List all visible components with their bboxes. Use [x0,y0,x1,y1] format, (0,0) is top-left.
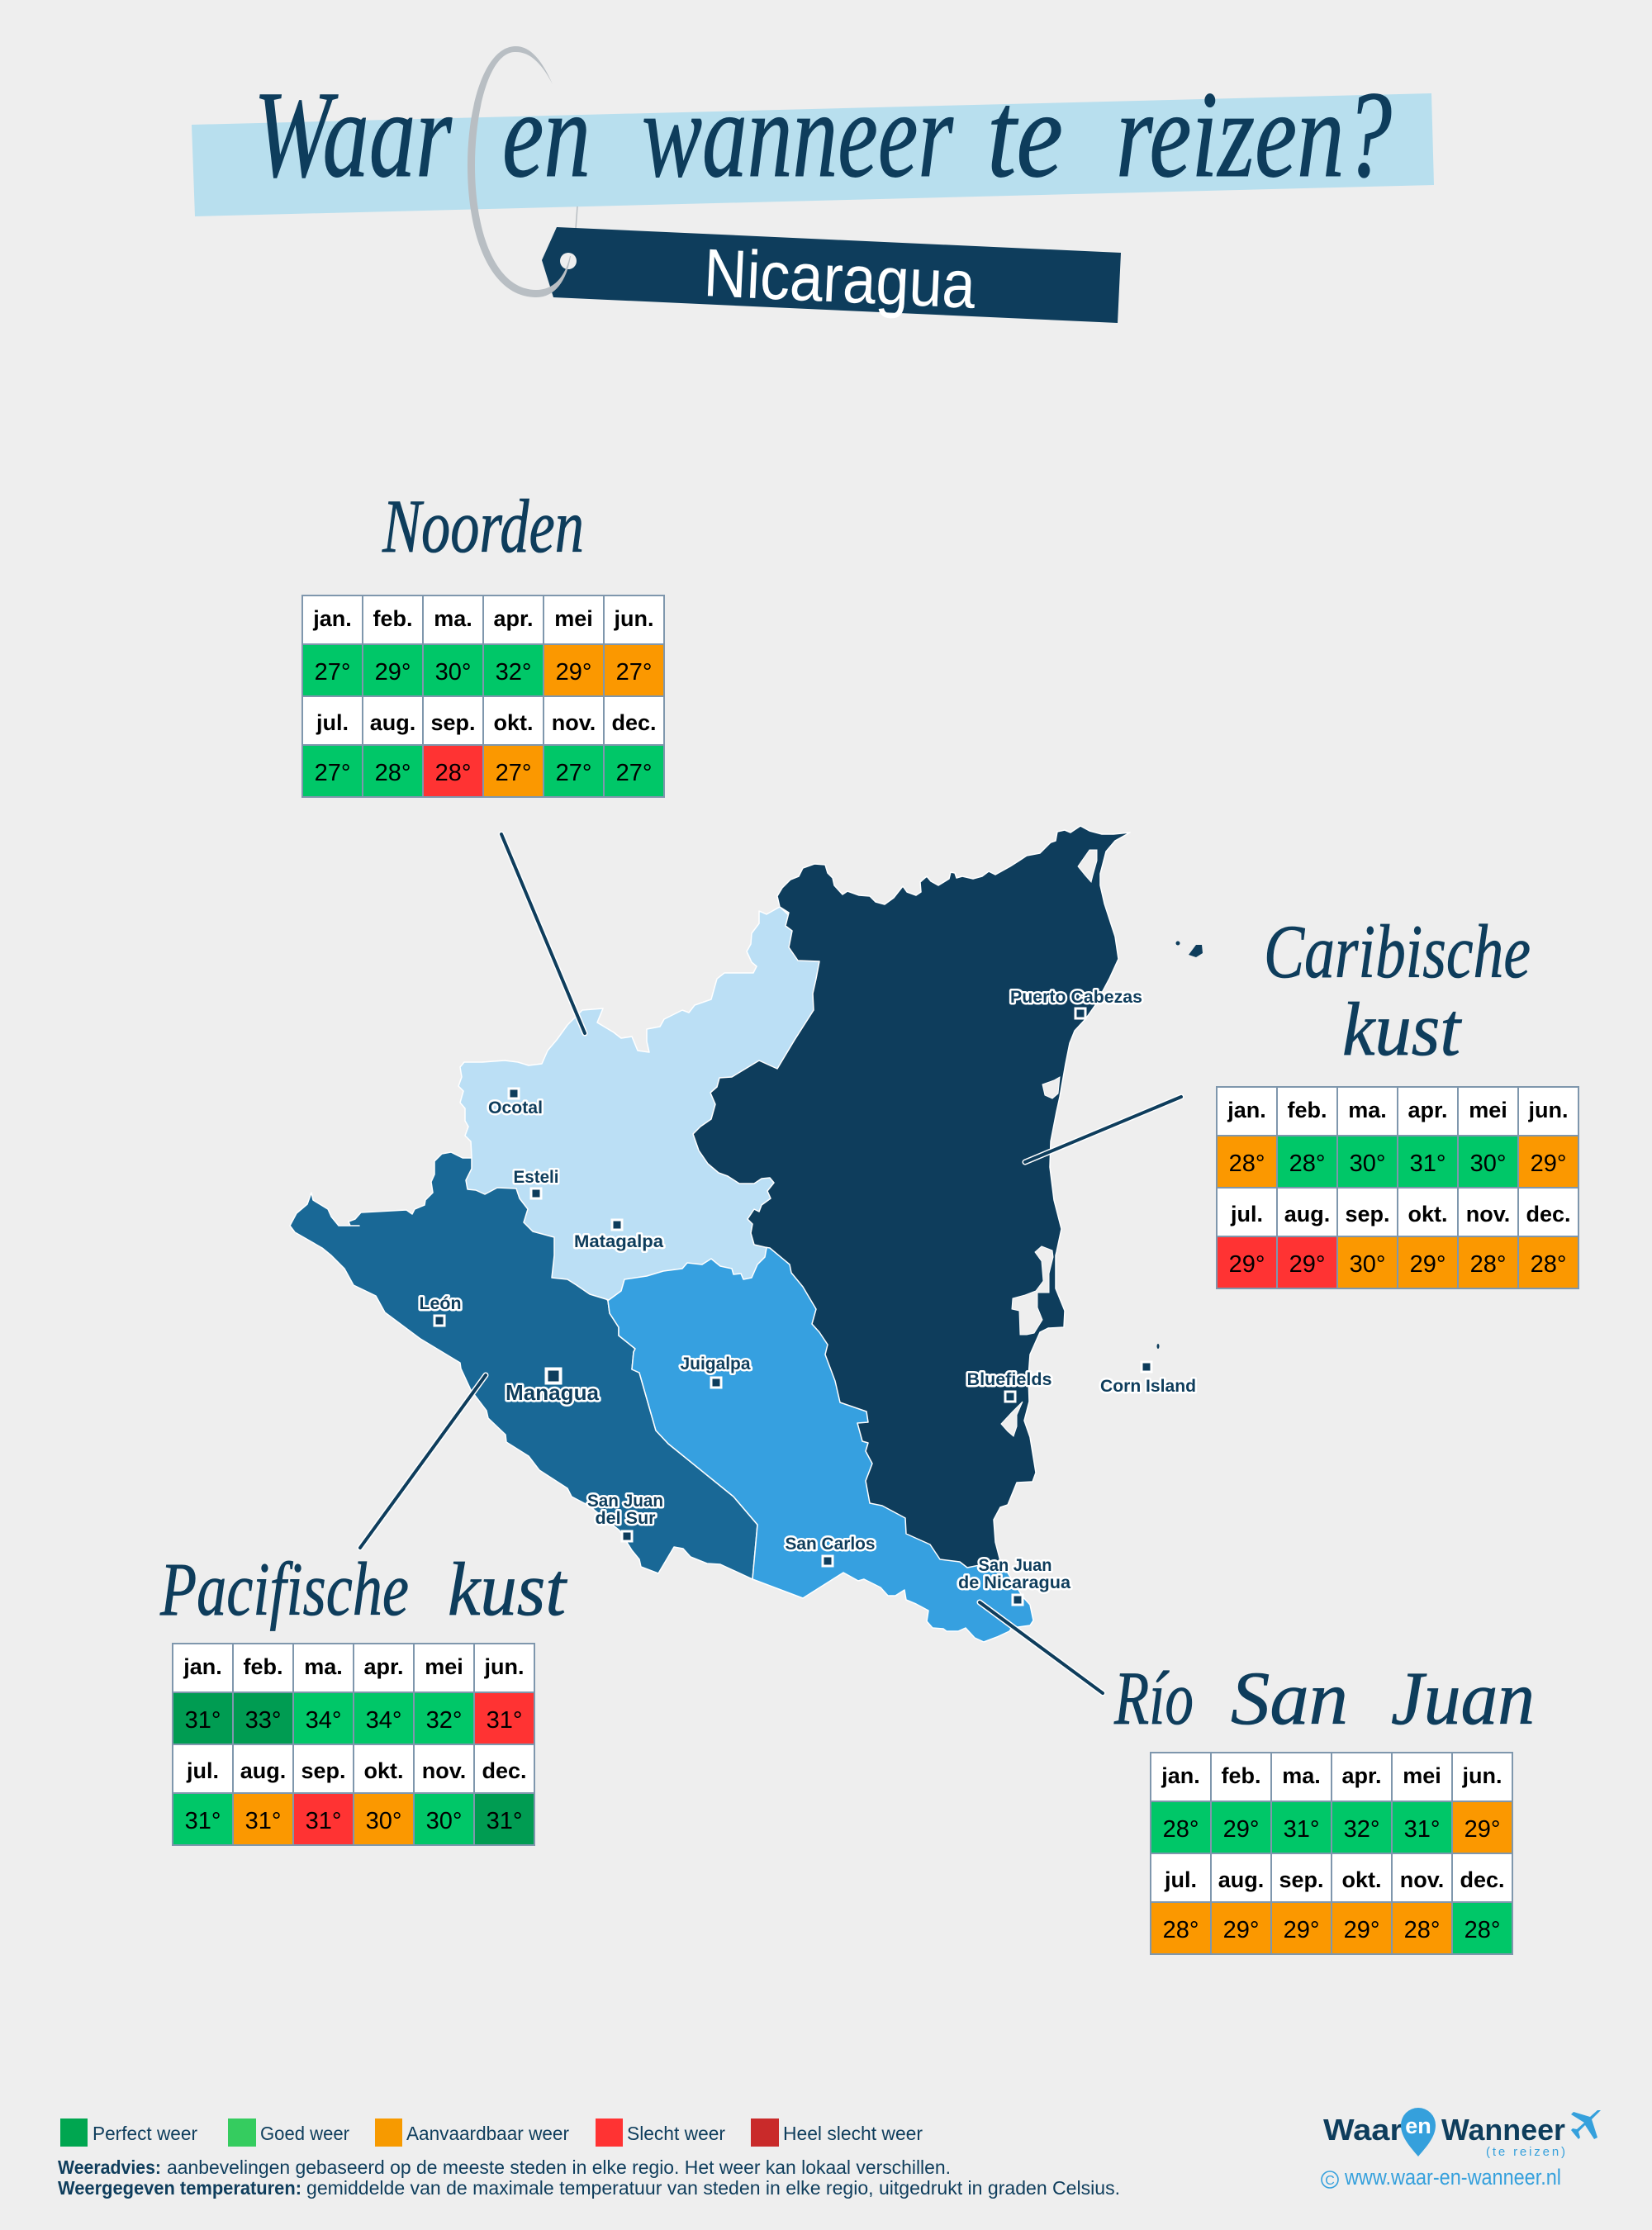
callout line: Río San Juan [980,1602,1103,1693]
city: Matagalpa [574,1220,663,1251]
table: Caribische kust: dec. [1526,1202,1571,1226]
logo: Waar en Wanneer: Waar [1323,2113,1403,2147]
city: Corn Island [1100,1362,1196,1396]
table: Pacifische kust: jul. [186,1758,219,1783]
table: Pacifische kust: okt. [363,1758,404,1783]
table: Caribische kust: jul. [1230,1202,1263,1226]
title [254,66,1392,203]
legend item: Slecht weer [596,2118,725,2147]
heading: Río San Juan: Juan [1391,1656,1535,1740]
islands [1156,942,1203,1349]
table: Caribische kust: 29° [1531,1151,1566,1177]
table: Noorden: 27° [616,659,652,686]
legend item: Goed weer [228,2118,349,2147]
table: Pacifische kust: jan. [183,1654,222,1679]
table: Noorden: apr. [493,606,534,631]
table: Río San Juan: 29° [1464,1816,1500,1843]
table: Caribische kust: 29° [1289,1251,1325,1278]
website credit: C [1325,2174,1335,2188]
table: Noorden: 27° [616,760,652,786]
table: Río San Juan: 29° [1284,1917,1319,1943]
table: Caribische kust: 28° [1531,1251,1566,1278]
table: Río San Juan: aug. [1218,1867,1264,1892]
callout line: Pacifische kust [360,1375,486,1548]
city: San Juan de Nicaragua: de Nicaragua [958,1573,1070,1592]
heading: Caribische kust: kust [1342,987,1462,1071]
table: Pacifische kust [173,1644,534,1845]
table: Río San Juan: 32° [1344,1816,1379,1843]
legend item: Aanvaardbaar weer: Aanvaardbaar weer [406,2123,569,2144]
table: Río San Juan: jun. [1462,1763,1502,1788]
table: Río San Juan: jul. [1164,1867,1197,1892]
heading: Caribische kust: Caribische [1264,909,1531,994]
table: Río San Juan: 31° [1284,1816,1319,1843]
table: Noorden: jun. [613,606,654,631]
region: Río San Juan [608,1239,1033,1642]
table: Noorden: jan. [312,606,352,631]
table: Pacifische kust: 30° [426,1808,462,1834]
city: San Juan del Sur [587,1492,663,1541]
city: San Carlos [785,1535,876,1566]
table: Río San Juan: 29° [1223,1917,1259,1943]
logo: Waar en Wanneer: (te reizen) [1486,2145,1565,2159]
table: Pacifische kust: 32° [426,1707,462,1734]
tag ring [468,46,571,297]
tag string [576,206,577,229]
legend item: Perfect weer: Perfect weer [93,2123,197,2144]
city: San Juan del Sur: San Juan [587,1492,663,1511]
legend item: Goed weer: Goed weer [260,2123,349,2144]
table: Río San Juan: 31° [1404,1816,1440,1843]
table: Río San Juan: dec. [1460,1867,1505,1892]
table: Río San Juan: ma. [1282,1763,1321,1788]
legend item: Aanvaardbaar weer [375,2118,569,2147]
table: Pacifische kust: 31° [185,1808,221,1834]
table: Caribische kust: 31° [1410,1151,1446,1177]
city: San Juan de Nicaragua [958,1556,1070,1605]
table: Noorden: 28° [435,760,471,786]
icon: map pin: en [1405,2114,1431,2138]
table: Caribische kust: jun. [1528,1098,1568,1122]
table: Río San Juan: 28° [1404,1917,1440,1943]
heading: Pacifische kust: kust [448,1547,567,1631]
table: Río San Juan: mei [1403,1763,1441,1788]
city: San Carlos: San Carlos [785,1535,876,1554]
header [192,46,1434,323]
panel: Río San Juan [1113,1656,1535,1954]
table: Río San Juan: 28° [1163,1917,1199,1943]
heading: Noorden: Noorden [382,484,584,568]
table: Pacifische kust: 30° [366,1808,401,1834]
table: Noorden: 27° [496,760,531,786]
city: Puerto Cabezas: Puerto Cabezas [1010,988,1142,1007]
table: Noorden: 32° [496,659,531,686]
city: Ocotal: Ocotal [488,1098,543,1117]
city: Managua: Managua [506,1380,600,1405]
table: Noorden: sep. [430,710,476,735]
heading: Río San Juan: Río [1113,1656,1194,1740]
heading: Caribische kust [1264,909,1531,1071]
table: Caribische kust: 28° [1229,1151,1265,1177]
table: Pacifische kust: jun. [484,1654,524,1679]
table: Noorden: 29° [556,659,591,686]
table: Caribische kust [1217,1087,1578,1288]
table: Noorden: nov. [552,710,596,735]
table: Noorden: 30° [435,659,471,686]
title: te [987,66,1063,203]
callout line: Noorden [501,834,585,1033]
city: León: León [420,1294,461,1313]
city: Bluefields [966,1370,1052,1402]
logo: Waar en Wanneer: Wanneer [1441,2113,1565,2147]
tag: Nicaragua [542,227,1121,323]
table: Pacifische kust: feb. [243,1654,283,1679]
logo: Waar en Wanneer [1323,2108,1601,2159]
table: Noorden: feb. [373,606,413,631]
city: San Juan de Nicaragua: San Juan [978,1556,1052,1575]
table: Caribische kust: 30° [1350,1151,1385,1177]
table: Pacifische kust: 31° [306,1808,341,1834]
city: Matagalpa: Matagalpa [574,1232,663,1251]
table: Caribische kust: nov. [1466,1202,1510,1226]
footnote: Weergegeven temperaturen: gemiddelde van de maximale temperatuur van steden in elke regio, uitgedrukt in graden Celsius. [306,2177,1120,2199]
table: Río San Juan: jan. [1161,1763,1200,1788]
table: Caribische kust: ma. [1348,1098,1387,1122]
table: Noorden: 27° [556,760,591,786]
table: Río San Juan: 29° [1223,1816,1259,1843]
region: Pacifische kust [290,1152,757,1579]
table: Caribische kust: mei [1469,1098,1507,1122]
table: Caribische kust: apr. [1408,1098,1448,1122]
title: en [502,66,591,203]
table: Caribische kust: feb. [1287,1098,1327,1122]
table: Río San Juan: 28° [1464,1917,1500,1943]
city: Juigalpa [681,1355,751,1388]
table: Río San Juan: 29° [1344,1917,1379,1943]
footnote: Weeradvies: aanbevelingen gebaseerd op de meeste steden in elke regio. Het weer kan lokaal verschillen. [167,2156,951,2178]
panel: Pacifische kust [159,1547,567,1845]
table: Pacifische kust: 34° [366,1707,401,1734]
table: Noorden: ma. [434,606,472,631]
title: Waar [254,66,452,203]
table: Pacifische kust: 33° [245,1707,281,1734]
city: Puerto Cabezas [1010,988,1142,1018]
panel: Caribische kust [1217,909,1578,1288]
heading: Río San Juan: San [1231,1656,1348,1740]
table: Pacifische kust: apr. [363,1654,404,1679]
icon: map pin [1401,2108,1436,2156]
table: Río San Juan: feb. [1221,1763,1261,1788]
heading: Río San Juan [1113,1656,1535,1740]
table: Caribische kust: 29° [1229,1251,1265,1278]
region: Caribische kust [693,826,1130,1568]
table: Pacifische kust: nov. [422,1758,466,1783]
city: San Juan del Sur: del Sur [595,1509,656,1528]
table: Pacifische kust: aug. [240,1758,286,1783]
lagoons [1001,850,1097,1436]
city: Juigalpa: Juigalpa [681,1355,751,1374]
map of Nicaragua [290,826,1203,1642]
table: Caribische kust: okt. [1408,1202,1448,1226]
table: Noorden [302,595,664,797]
legend item: Perfect weer [60,2118,197,2147]
table: Noorden: aug. [370,710,415,735]
table: Pacifische kust: sep. [301,1758,346,1783]
table: Río San Juan: okt. [1341,1867,1382,1892]
table: Río San Juan: apr. [1341,1763,1382,1788]
table: Río San Juan: sep. [1279,1867,1324,1892]
table: Caribische kust: 29° [1410,1251,1446,1278]
table: Pacifische kust: ma. [304,1654,343,1679]
table: Río San Juan: 28° [1163,1816,1199,1843]
city: León [420,1294,461,1326]
table: Caribische kust: 28° [1289,1151,1325,1177]
icon: plane [1571,2110,1601,2139]
table: Noorden: okt. [493,710,534,735]
table: Noorden: 27° [315,760,350,786]
legend item: Heel slecht weer: Heel slecht weer [783,2123,923,2144]
table: Noorden: mei [554,606,593,631]
city: Esteli: Esteli [514,1168,558,1187]
table: Caribische kust: 30° [1350,1251,1385,1278]
city: Corn Island: Corn Island [1100,1377,1196,1396]
title: reizen? [1116,66,1392,203]
table: Caribische kust: 28° [1470,1251,1506,1278]
title band [192,93,1434,216]
region: Noorden [458,907,826,1300]
table: Noorden: jul. [316,710,349,735]
city: Ocotal [488,1089,543,1117]
footnote: Weergegeven temperaturen: Weergegeven temperaturen: [58,2177,301,2199]
table: Pacifische kust: mei [425,1654,463,1679]
table: Río San Juan: nov. [1400,1867,1444,1892]
table: Caribische kust: 30° [1470,1151,1506,1177]
legend [60,2118,923,2147]
title: wanneer [642,66,953,203]
legend item: Heel slecht weer [751,2118,923,2147]
heading: Pacifische kust: Pacifische [159,1547,409,1631]
table: Pacifische kust: 34° [306,1707,341,1734]
city: Managua [506,1369,600,1405]
legend item: Slecht weer: Slecht weer [627,2123,725,2144]
panel: Noorden [302,484,664,797]
footnote: Weeradvies: Weeradvies: [58,2156,161,2178]
table: Caribische kust: sep. [1345,1202,1390,1226]
table: Pacifische kust: 31° [487,1707,522,1734]
city: Esteli [514,1168,558,1198]
tag: Nicaragua: Nicaragua [702,235,977,323]
table: Noorden: dec. [611,710,657,735]
callout line: Caribische kust [1025,1097,1181,1162]
table: Río San Juan [1151,1753,1512,1954]
table: Pacifische kust: 31° [185,1707,221,1734]
city: Bluefields: Bluefields [966,1370,1052,1389]
table: Noorden: 29° [375,659,411,686]
table: Caribische kust: jan. [1227,1098,1266,1122]
table: Noorden: 28° [375,760,411,786]
table: Pacifische kust: 31° [487,1808,522,1834]
website credit: www.waar-en-wanneer.nl [1344,2165,1561,2190]
table: Pacifische kust: 31° [245,1808,281,1834]
table: Noorden: 27° [315,659,350,686]
table: Pacifische kust: dec. [482,1758,527,1783]
table: Caribische kust: aug. [1284,1202,1330,1226]
